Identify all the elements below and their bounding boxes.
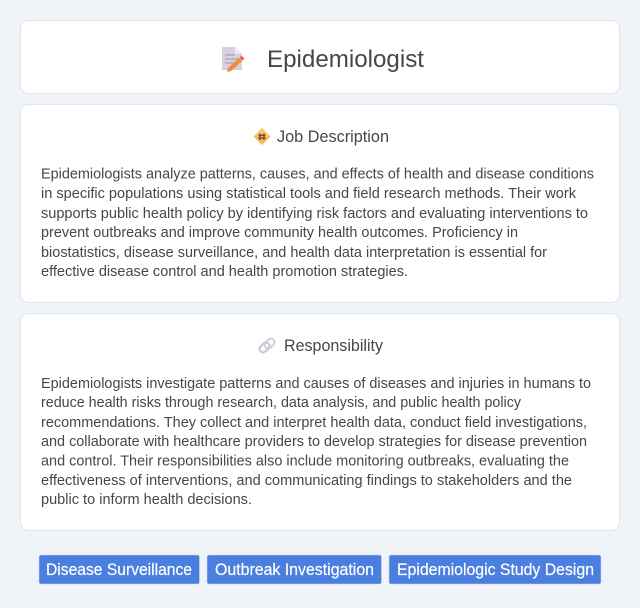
text block: responsibility: recommendations. They collect and interpret health data, conduct field investigations, bbox=[41, 415, 587, 431]
text block: responsibility: effectiveness of interventions, and communicating findings to stakeholders and the bbox=[41, 473, 572, 489]
text block: job description: prevent outbreaks and improve community health outcomes. Proficiency in bbox=[41, 225, 518, 241]
text block: job description: effective disease control and health promotion strategies. bbox=[41, 264, 408, 280]
text block: job description: Epidemiologists analyze patterns, causes, and effects of health and disease conditions bbox=[41, 166, 594, 182]
text block: job description: biostatistics, disease surveillance, and health data interpretation is essential for bbox=[41, 245, 547, 261]
text block: responsibility: and control. Their responsibilities also include monitoring outbreaks, evaluating the bbox=[41, 454, 569, 470]
text block: job description: in specific populations using statistical tools and field research methods. Their work bbox=[41, 186, 577, 202]
tag: outbreak investigation: Outbreak Investigation bbox=[215, 561, 374, 579]
text block: responsibility: public to inform health decisions. bbox=[41, 492, 252, 508]
icon: chain link bbox=[258, 337, 276, 354]
panel: job description bbox=[20, 104, 620, 302]
text block: responsibility bbox=[41, 376, 591, 508]
text block: responsibility: reduce health risks through research, data analysis, and public health policy bbox=[41, 395, 522, 411]
tag: epidemiologic study design: Epidemiologic Study Design bbox=[397, 561, 594, 579]
panel: title card bbox=[20, 20, 620, 94]
icon: document with pencil bbox=[222, 47, 244, 72]
tag: disease surveillance bbox=[39, 555, 200, 584]
text block: responsibility: and collaborate with healthcare providers to develop strategies for disease prevention bbox=[41, 434, 587, 450]
heading: responsibility: Responsibility bbox=[284, 337, 384, 355]
tag: outbreak investigation bbox=[207, 555, 382, 584]
text block: responsibility: Epidemiologists investigate patterns and causes of diseases and injuries in humans to bbox=[41, 376, 591, 392]
icon: diamond sign bbox=[254, 128, 270, 145]
tag: epidemiologic study design bbox=[389, 555, 601, 584]
tag: disease surveillance: Disease Surveillance bbox=[46, 561, 192, 579]
heading: job description: Job Description bbox=[277, 128, 389, 146]
text block: job description bbox=[41, 166, 594, 280]
title: Epidemiologist bbox=[267, 46, 424, 73]
text block: job description: supports public health policy by identifying risk factors and evaluating interventions to bbox=[41, 206, 588, 222]
panel: responsibility bbox=[20, 314, 620, 530]
